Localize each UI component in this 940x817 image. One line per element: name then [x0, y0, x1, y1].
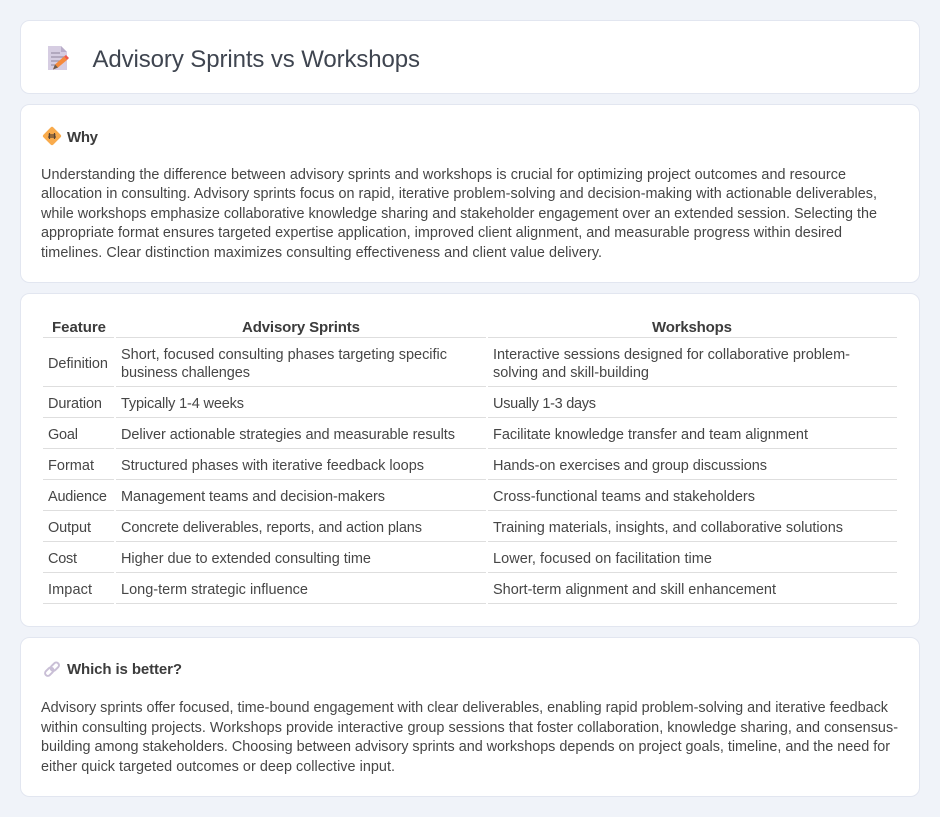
row: output: Concrete deliverables, reports, and action plans — [121, 520, 422, 536]
row: cost — [48, 551, 712, 567]
row: duration — [48, 396, 596, 412]
row: format: Structured phases with iterative feedback loops — [121, 458, 424, 474]
row: impact: Impact — [48, 582, 92, 598]
text block: which is better: building among stakeholders. Choosing between advisory sprints and workshops depends on project goals, timeline, and the need for — [41, 739, 890, 755]
text block: why: allocation in consulting. Advisory sprints focus on rapid, iterative problem-solving and decision-making with actionable deliverables, — [41, 186, 877, 202]
text block: why: Understanding the difference between advisory sprints and workshops is crucial for optimizing project outcomes and resource — [41, 167, 846, 183]
row: definition: Short, focused consulting phases targeting specific — [121, 347, 447, 363]
row: definition: business challenges — [121, 365, 250, 381]
row: audience: Cross-functional teams and stakeholders — [493, 489, 755, 505]
row: output: Training materials, insights, and collaborative solutions — [493, 520, 843, 536]
text block: why — [40, 167, 877, 261]
row: duration: Usually 1-3 days — [493, 396, 596, 412]
panel: header — [20, 20, 920, 94]
heading: which is better: Which is better? — [67, 661, 182, 678]
row: cost: Cost — [48, 551, 77, 567]
row: audience — [48, 489, 755, 505]
table header: Workshops — [652, 319, 732, 336]
row: goal: Goal — [48, 427, 78, 443]
row: format: Hands-on exercises and group discussions — [493, 458, 767, 474]
row: format — [48, 458, 767, 474]
row: output — [48, 520, 843, 536]
text block: which is better: within consulting projects. Workshops provide interactive group sessions that foster collaboration, knowledge sharing, and consensus- — [40, 720, 898, 736]
panel: which is better — [20, 638, 920, 796]
row: duration: Typically 1-4 weeks — [121, 396, 244, 412]
row: audience: Management teams and decision-makers — [121, 489, 385, 505]
row: definition: Definition — [48, 356, 108, 372]
row: definition: solving and skill-building — [493, 365, 649, 381]
row: goal: Deliver actionable strategies and measurable results — [121, 427, 455, 443]
table header: Advisory Sprints — [242, 319, 360, 336]
row: cost: Lower, focused on facilitation time — [493, 551, 712, 567]
panel: why — [20, 104, 920, 282]
heading: why: Why — [67, 129, 99, 146]
row: impact: Long-term strategic influence — [121, 582, 308, 598]
row: definition — [48, 347, 850, 381]
row: audience: Audience — [48, 489, 107, 505]
row: format: Format — [48, 458, 94, 474]
text block: why: while workshops emphasize collaborative knowledge sharing and stakeholder engagement over an extended session. Selecting the — [40, 206, 877, 222]
icon: chain link — [44, 661, 60, 677]
row: impact: Short-term alignment and skill enhancement — [493, 582, 776, 598]
icon: road-work diamond — [42, 126, 62, 146]
row: output: Output — [48, 520, 91, 536]
title: Advisory Sprints vs Workshops — [92, 46, 420, 73]
row: cost: Higher due to extended consulting time — [121, 551, 371, 567]
row: goal: Facilitate knowledge transfer and team alignment — [493, 427, 808, 443]
panel: comparison table — [20, 294, 920, 626]
row: impact — [48, 582, 776, 598]
text block: which is better: Advisory sprints offer focused, time-bound engagement with clear deliverables, enabling rapid problem-solving and iterative feedback — [41, 700, 889, 716]
table header — [52, 319, 732, 336]
icon: memo with pencil — [48, 46, 69, 70]
text block: which is better — [40, 700, 898, 775]
table header: Feature — [52, 319, 106, 336]
row: goal — [48, 427, 808, 443]
text block: which is better: either quick targeted outcomes or deep collective input. — [41, 759, 395, 775]
row: definition: Interactive sessions designed for collaborative problem- — [493, 347, 850, 363]
text block: why: timelines. Clear distinction maximizes consulting effectiveness and client value delivery. — [41, 245, 602, 261]
text block: why: appropriate format ensures targeted expertise application, improved client alignment, and measurable progress within desired — [41, 225, 842, 241]
row: duration: Duration — [48, 396, 102, 412]
